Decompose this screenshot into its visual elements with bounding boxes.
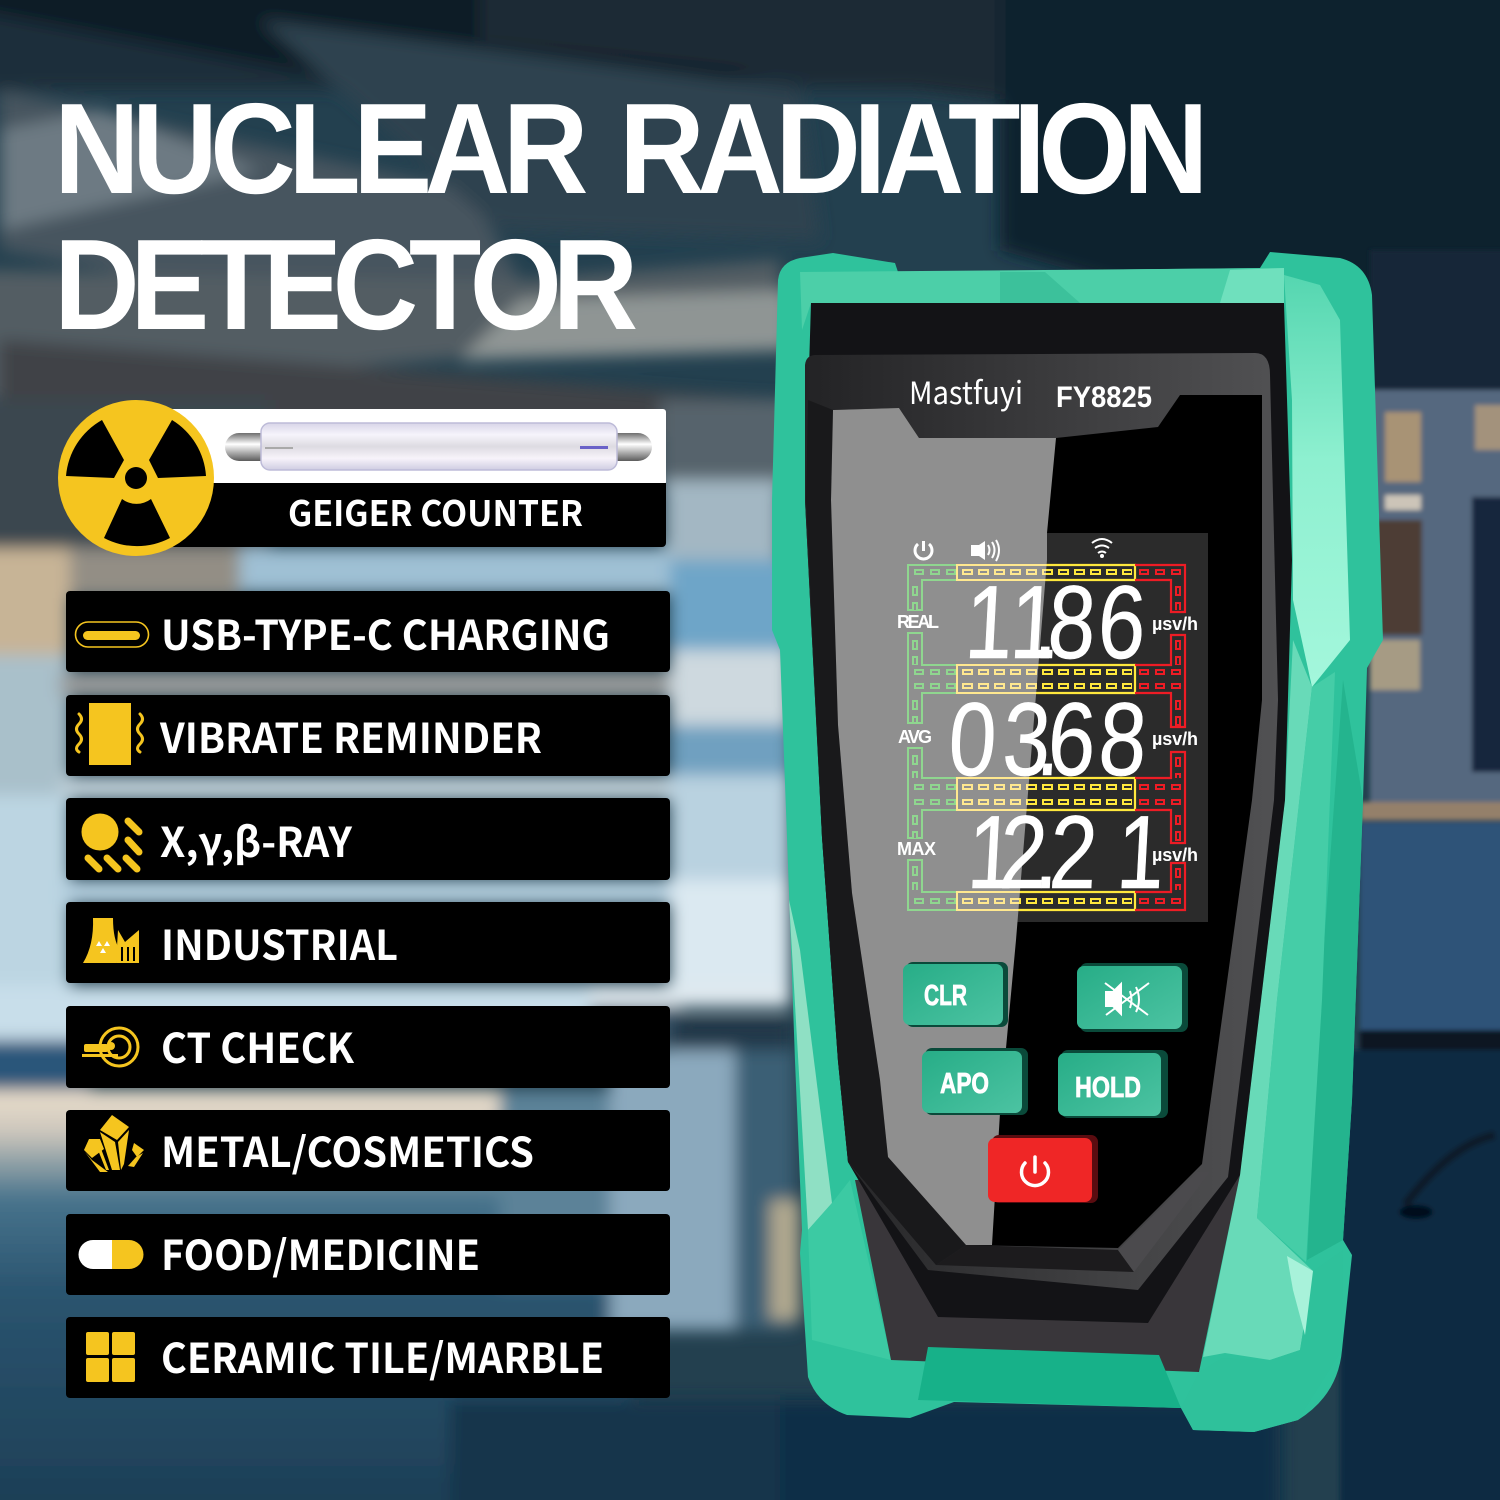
usb label: USB-TYPE-C CHARGING [161, 602, 610, 662]
ct label: CT CHECK [161, 1015, 355, 1075]
panel: vibrate reminder [66, 695, 670, 776]
device: radiation detector [772, 252, 1383, 1432]
icon: ray source [82, 814, 139, 869]
title: DETECTOR [54, 213, 638, 357]
device dark lower frame [855, 1175, 1240, 1372]
device tray [936, 1245, 1134, 1272]
food label: FOOD/MEDICINE [161, 1222, 480, 1282]
panel: geiger counter [58, 400, 666, 556]
reading: real: 11.86 [962, 565, 1149, 681]
button: hold: HOLD [1075, 1072, 1141, 1104]
device top band [800, 268, 1284, 330]
panel: x gamma beta ray [66, 798, 670, 880]
icon: lcd speaker [971, 540, 999, 561]
icon: lcd power [915, 541, 932, 559]
icon: geiger tube [225, 423, 652, 470]
meter: yellow segments [957, 565, 1135, 910]
icon: crystals [84, 1115, 144, 1172]
icon: radiation symbol [58, 400, 214, 556]
device right bottom corner [1181, 1250, 1343, 1432]
icon: nuclear plant [83, 918, 139, 963]
reading: max: µsv/h [1152, 845, 1198, 865]
button: power [988, 1135, 1098, 1203]
device grey bezel plate [805, 353, 1278, 1290]
industrial label: INDUSTRIAL [161, 912, 398, 972]
device right lower grip [1307, 680, 1363, 1260]
reading: avg: AVG [898, 727, 932, 747]
icon: vibrating phone [76, 703, 142, 765]
button: clr: CLR [924, 980, 967, 1012]
device bottom green strip [918, 1347, 1181, 1408]
button: clr [903, 962, 1008, 1027]
panel: ct check [66, 1006, 670, 1088]
vibrate label: VIBRATE REMINDER [159, 705, 542, 765]
geiger panel black area [160, 483, 666, 547]
icon: power symbol [1022, 1157, 1049, 1186]
panel: food medicine [66, 1214, 670, 1295]
ray label: X,γ,β-RAY [160, 809, 353, 869]
title: NUCLEAR RADIATION [54, 77, 1209, 221]
reading: avg: µsv/h [1152, 729, 1198, 749]
button: apo [922, 1048, 1028, 1115]
reading: max: 12.21 [965, 795, 1168, 911]
reading: max: MAX [897, 839, 936, 859]
screen reflection [831, 408, 1056, 1245]
lcd status icons [915, 539, 1112, 561]
device screen [831, 395, 1262, 1248]
meter: red segments [1135, 565, 1185, 910]
reading: real: µsv/h [1152, 614, 1198, 634]
brand name: Mastfuyi [909, 368, 1023, 413]
ceramic label: CERAMIC TILE/MARBLE [161, 1325, 604, 1385]
reading: avg [898, 682, 1198, 798]
icon: lcd wifi [1092, 539, 1112, 557]
model number: FY8825 [1056, 381, 1152, 414]
icon: ct scanner [82, 1028, 138, 1066]
geiger panel white area [160, 409, 666, 485]
icon: usb-c port [76, 622, 148, 647]
button: hold [1058, 1050, 1168, 1118]
meter: green segments [908, 565, 957, 910]
reading: real: REAL [897, 612, 939, 632]
icon: muted speaker [1105, 983, 1149, 1015]
reading: real [897, 565, 1198, 681]
icon: capsule [78, 1240, 144, 1269]
lcd display [890, 533, 1208, 922]
device left highlight [789, 900, 832, 1230]
device right upper grip highlight [1284, 275, 1350, 687]
geiger label: GEIGER COUNTER [288, 486, 583, 537]
reading: max [897, 795, 1198, 911]
panel: metal cosmetics [66, 1110, 670, 1191]
device black frame [805, 303, 1292, 1323]
panel: ceramic tile marble [66, 1317, 670, 1398]
reading: avg: 03.68 [946, 682, 1150, 798]
metal label: METAL/COSMETICS [161, 1119, 534, 1179]
icon: tiles [86, 1332, 135, 1382]
panel: usb type-c [66, 591, 670, 672]
title [54, 77, 1209, 357]
panel: industrial [66, 902, 670, 983]
button: mute [1077, 963, 1188, 1032]
button: apo: APO [940, 1068, 989, 1100]
device green body [772, 252, 1383, 1432]
device inner left bezel [806, 400, 966, 1265]
